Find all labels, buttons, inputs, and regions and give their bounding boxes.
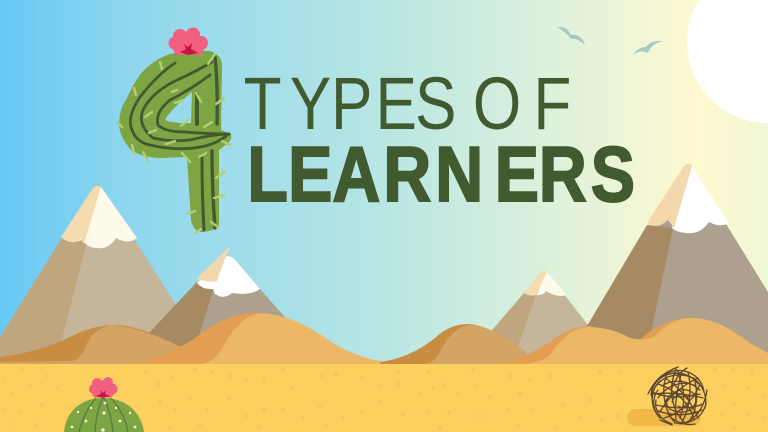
title line: LEARNERS: LEARNERS	[247, 131, 635, 218]
number 4 body	[119, 51, 231, 232]
birds	[557, 27, 663, 55]
cactus body	[64, 398, 144, 432]
cactus flower	[89, 377, 118, 398]
cactus dots	[71, 402, 136, 432]
mountain large right	[587, 164, 768, 366]
mountain middle left	[149, 248, 290, 366]
sand ground	[0, 364, 768, 432]
bird left	[557, 27, 585, 45]
title	[244, 63, 635, 218]
sand speckles	[1, 367, 767, 430]
cactus ribs	[79, 398, 128, 432]
number 4 spines	[117, 54, 230, 233]
cactus number 4	[117, 28, 231, 233]
bird right	[633, 41, 663, 55]
dune left	[0, 325, 195, 366]
dune centre-right	[380, 324, 526, 366]
mountain far left	[0, 185, 178, 366]
dune right	[506, 318, 768, 366]
number 4 stripes	[130, 57, 229, 230]
sun	[687, 0, 768, 123]
tumbleweed	[648, 367, 707, 425]
mountain small right	[492, 271, 588, 366]
dune centre-left	[128, 313, 384, 366]
barrel cactus	[64, 377, 144, 432]
number 4 flower	[168, 28, 208, 56]
tumbleweed shadow	[627, 409, 701, 426]
title line: TYPES OF: TYPES OF	[244, 63, 571, 145]
